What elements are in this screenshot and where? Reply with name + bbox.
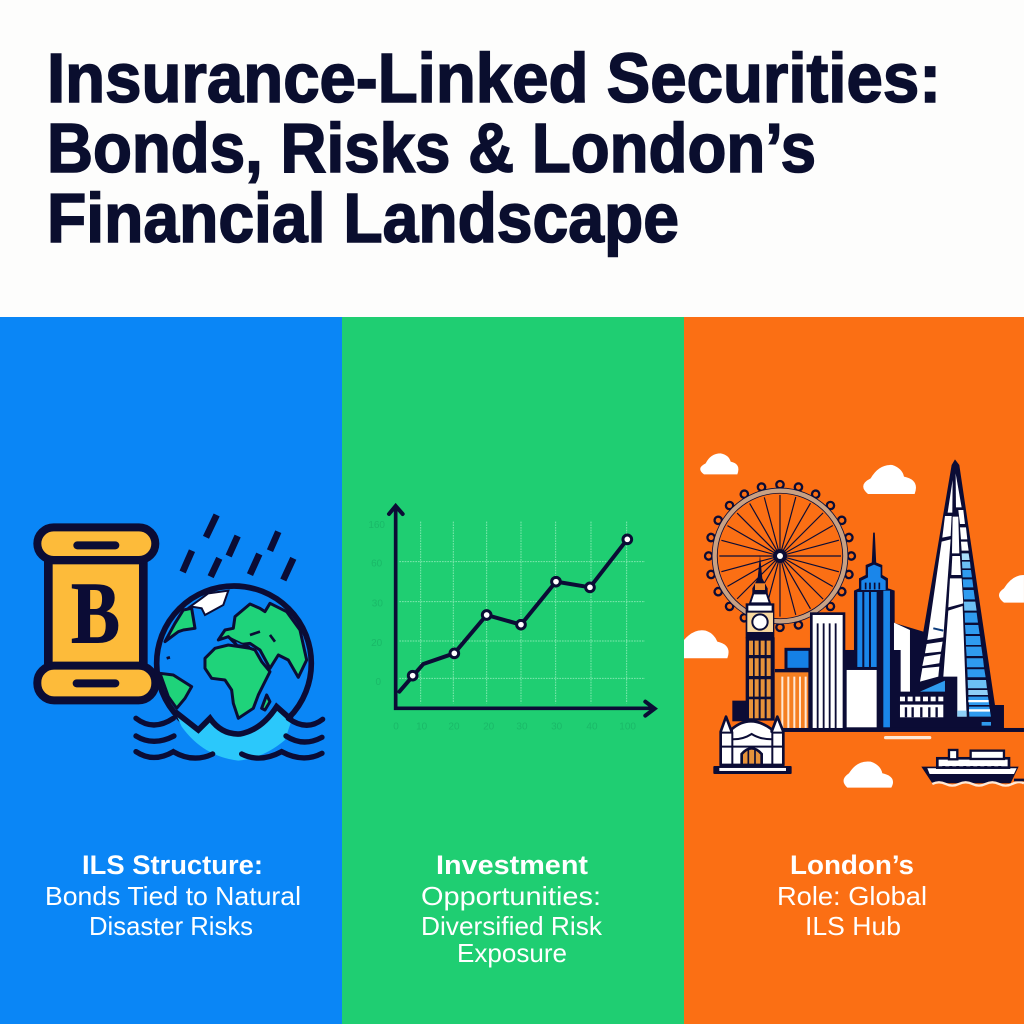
label: London's role	[777, 850, 927, 941]
label: London's role: Role: Global	[777, 881, 927, 911]
label: London's role: ILS Hub	[805, 911, 901, 941]
label: ILS structure	[45, 850, 301, 941]
westminster gatehouse	[713, 717, 792, 774]
flood water	[175, 707, 292, 761]
label: investment opportunities: Diversified Risk	[421, 911, 603, 941]
line chart: 30	[516, 721, 528, 732]
empire-style tower	[847, 533, 895, 730]
label: ILS structure: ILS Structure:	[82, 850, 263, 880]
line chart: 160	[368, 520, 385, 531]
line chart: 100	[619, 721, 636, 732]
title: Insurance-Linked Securities:	[47, 39, 941, 117]
line chart: 0	[376, 677, 382, 688]
label: investment opportunities	[421, 850, 603, 968]
clouds	[684, 453, 1024, 788]
london eye	[705, 481, 855, 631]
the shard	[890, 459, 1004, 728]
line chart: 30	[551, 721, 563, 732]
line chart: 0	[393, 721, 399, 732]
title: Bonds, Risks & London’s	[47, 109, 816, 187]
line chart: 40	[586, 721, 598, 732]
illustration: London skyline	[684, 453, 1024, 788]
globe	[157, 586, 311, 741]
big ben	[746, 555, 775, 721]
line chart: 60	[371, 559, 383, 570]
line chart: 20	[371, 638, 383, 649]
icon: bond scroll: B	[71, 565, 120, 663]
line chart: 10	[416, 721, 428, 732]
line chart: 20	[448, 721, 460, 732]
ground line and river	[774, 728, 1024, 732]
boat	[921, 750, 1024, 786]
label: investment opportunities: Opportunities:	[421, 881, 601, 911]
label: investment opportunities: Exposure	[457, 938, 567, 968]
label: ILS structure: Bonds Tied to Natural	[45, 881, 301, 911]
panel: investment opportunities	[342, 317, 684, 1024]
title: Financial Landscape	[47, 179, 679, 257]
panel: London's role	[684, 317, 1024, 1024]
icon: flooded globe with rain	[136, 515, 323, 761]
icon: bond scroll	[37, 527, 155, 700]
label: investment opportunities: Investment	[436, 850, 588, 880]
line chart: 30	[372, 599, 383, 610]
line chart: 20	[483, 721, 495, 732]
label: London's role: London’s	[790, 850, 914, 880]
label: ILS structure: Disaster Risks	[89, 911, 253, 941]
title	[47, 39, 941, 257]
panel: ILS structure	[0, 317, 342, 1024]
line chart	[368, 506, 655, 732]
skyline left: mid-rise buildings	[732, 612, 857, 731]
